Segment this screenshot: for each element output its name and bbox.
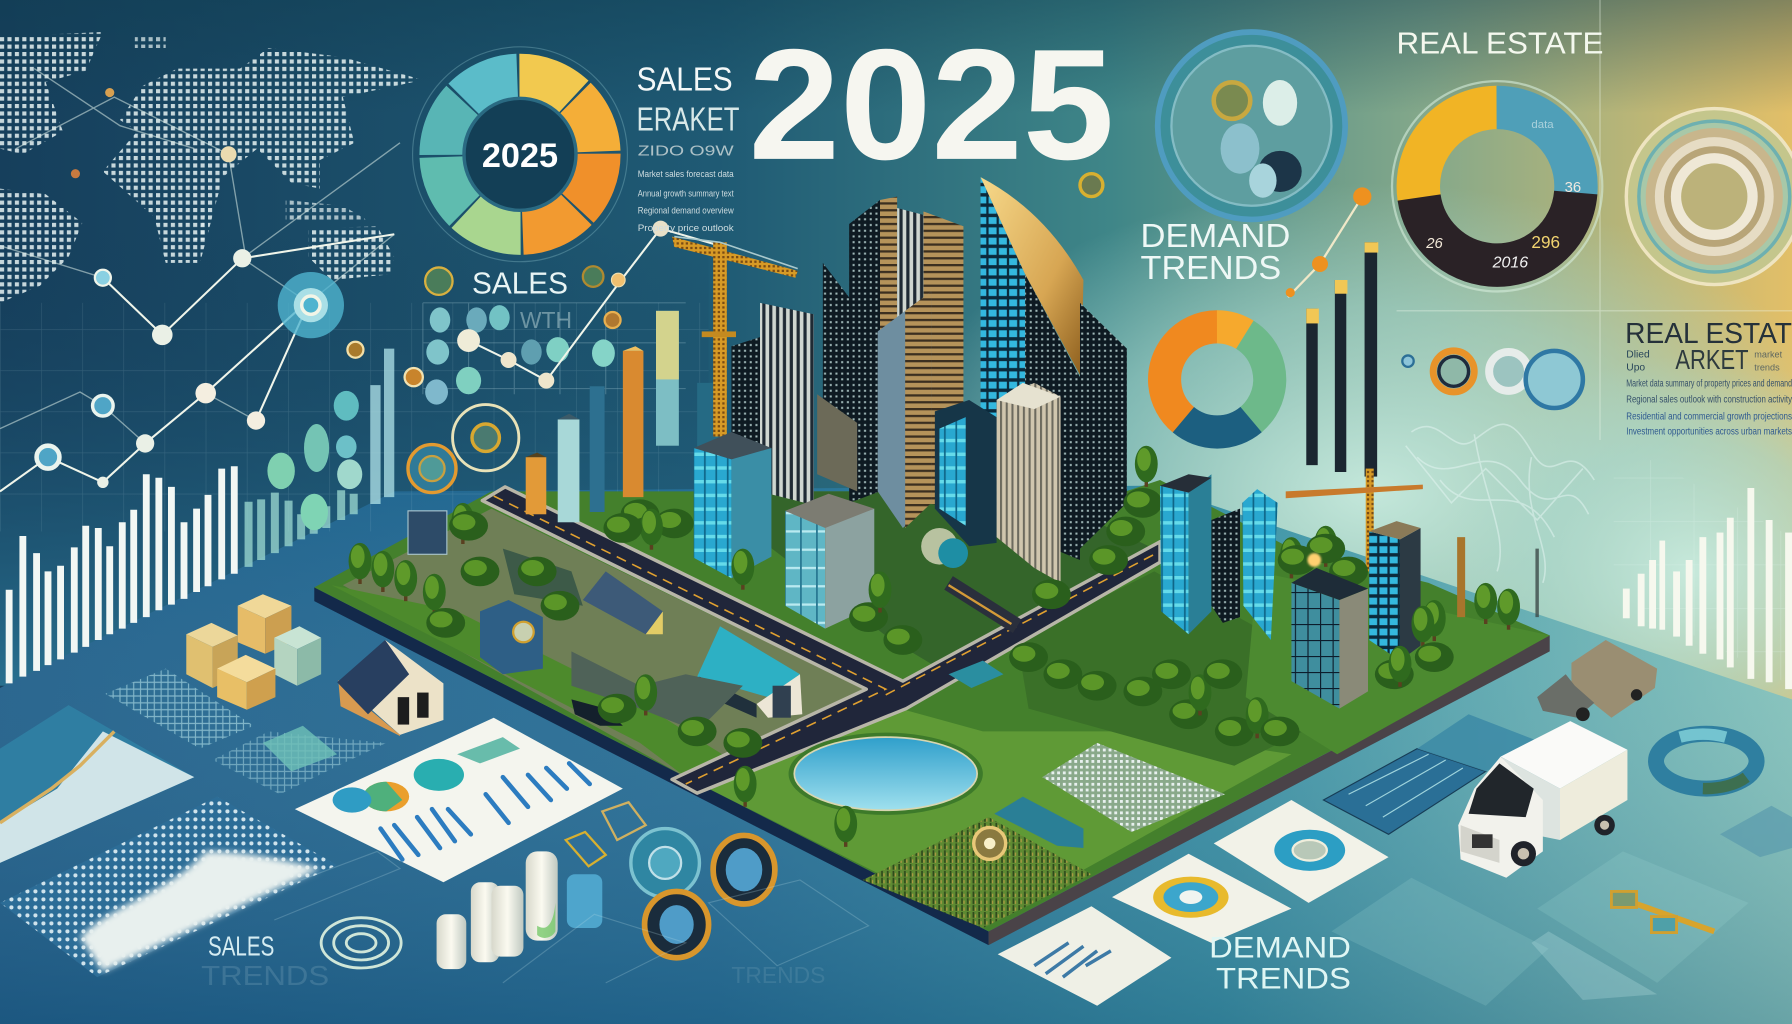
- mountain chart panel: [0, 705, 194, 863]
- faint network sketch: [1406, 424, 1594, 617]
- real estate market text panel: Dlied: [1626, 350, 1650, 361]
- white card: eye ring: [1214, 800, 1389, 903]
- city diorama: [314, 480, 1550, 945]
- tower glass front: [878, 291, 931, 528]
- real estate donut chart: 296: [1531, 232, 1560, 252]
- floor donut ring: [1656, 734, 1757, 789]
- heading: sales trends: TRENDS: [201, 960, 329, 991]
- white card: sketch chart: [998, 906, 1171, 1006]
- map: islands: [135, 37, 366, 240]
- white crop field: [1042, 743, 1225, 832]
- sales label with grid of bubbles: WTH: [520, 307, 572, 333]
- left bar chart: [6, 349, 394, 683]
- glass circle icon: [1080, 32, 1345, 219]
- small blue shops: [480, 600, 543, 674]
- dotted map panel: [0, 797, 337, 977]
- sales label with grid of bubbles: SALES: [472, 266, 568, 301]
- gold lens icons: [631, 829, 775, 958]
- tower stripe back: [731, 337, 760, 478]
- diorama base: [314, 587, 989, 945]
- title: sales market block: Annual growth summary text: [638, 189, 734, 199]
- title: sales market block: [637, 61, 739, 233]
- small grey truck: [1537, 640, 1657, 721]
- tower blue: [1160, 474, 1211, 634]
- top donut chart: [410, 44, 630, 264]
- heading: demand trends: TRENDS: [1141, 250, 1281, 287]
- ring icons: [1402, 351, 1583, 408]
- title: sales market block: ZIDO O9W: [638, 143, 734, 159]
- box green: [274, 626, 321, 686]
- real estate market text panel: REAL ESTAT: [1625, 318, 1792, 350]
- pond: [789, 733, 983, 815]
- title: sales market block: SALES: [637, 61, 733, 98]
- glow light: [1307, 553, 1321, 567]
- faint sketches on floor: TRENDS: [731, 962, 825, 988]
- tower thin crane: [1457, 537, 1465, 617]
- tower white stripes: [760, 303, 814, 505]
- world map: [0, 32, 423, 303]
- trees behind right: [1278, 526, 1368, 586]
- real estate donut chart: [1392, 81, 1602, 291]
- gold target rings: [453, 405, 519, 471]
- heading: demand trends: DEMAND: [1141, 218, 1290, 255]
- cylinder bars: [437, 851, 602, 969]
- tower teal frame: [785, 494, 874, 629]
- glass sphere: [921, 528, 958, 565]
- right bar chart: [1623, 488, 1792, 689]
- title: sales market block: Market sales forecast data: [638, 169, 735, 179]
- boxes: [186, 594, 321, 710]
- right building group: [949, 469, 1520, 746]
- crane left: [672, 237, 798, 437]
- road network: [482, 487, 1160, 793]
- tower slim cyan: [1242, 489, 1278, 640]
- tower teal low: [935, 400, 997, 546]
- tower framed: [1291, 568, 1368, 709]
- tower blue and gold: [849, 197, 897, 503]
- sales label with grid of bubbles: [405, 221, 720, 493]
- donut value labels: 26: [1425, 236, 1444, 252]
- document pie charts: [363, 782, 409, 811]
- small house: [337, 640, 443, 736]
- report document: [295, 718, 623, 882]
- tower dark right: [1080, 303, 1127, 549]
- district ground: [343, 509, 869, 777]
- real estate market text panel: Upo: [1626, 362, 1645, 373]
- tower mid dark: [817, 394, 857, 491]
- crane right: [1286, 469, 1423, 571]
- real estate donut chart: 36: [1565, 180, 1581, 196]
- teal vehicle: [994, 797, 1083, 848]
- real estate donut chart: data: [1531, 119, 1554, 131]
- teal pavilion: [949, 661, 1003, 688]
- transparent data sheets: [1331, 806, 1792, 1006]
- real estate market text panel: trends: [1754, 362, 1780, 372]
- parked van: [571, 699, 623, 726]
- gold clip icon: [1617, 897, 1714, 931]
- tower grey and gold: [897, 208, 963, 509]
- small barn: [583, 571, 663, 634]
- faint sketches on floor: [240, 851, 869, 988]
- map: australia: [309, 226, 394, 280]
- trees right: [1375, 583, 1520, 689]
- orange donut chart: [1143, 305, 1291, 453]
- pie bubbles on wall: [334, 391, 359, 421]
- box front: [217, 655, 275, 710]
- tower cyan glass: [694, 432, 771, 578]
- chart hub glow: [278, 272, 344, 338]
- real estate market text panel: ARKET: [1675, 344, 1749, 375]
- heading: demand trends bottom: TRENDS: [1216, 963, 1351, 996]
- white delivery truck: [1458, 721, 1627, 878]
- map: eurasia and africa: [103, 48, 423, 263]
- network line chart: [0, 69, 400, 491]
- heading: demand trends: [1141, 218, 1290, 287]
- heading: demand trends bottom: DEMAND: [1209, 932, 1351, 965]
- metal tag icons: [566, 802, 646, 866]
- tower dark dots: [823, 263, 859, 469]
- map: americas: [0, 32, 103, 154]
- document blue bars: [381, 763, 590, 859]
- trees left: [349, 503, 857, 847]
- cyan roof house: [697, 626, 800, 697]
- title: sales market block: Regional demand overview: [638, 206, 734, 216]
- tower curved blue gold: [981, 177, 1083, 560]
- black bar chart with trend dots: [1286, 187, 1378, 477]
- title: 2025: 2025: [749, 17, 1114, 193]
- pavement clutter: [571, 651, 743, 731]
- heading: real estate: REAL ESTATE: [1397, 26, 1603, 61]
- mesh paper tiles: [105, 669, 386, 794]
- dark crop field: [863, 817, 1091, 928]
- trees centre meadow: [1009, 642, 1299, 746]
- skyscraper group: [603, 177, 1162, 655]
- box left: [186, 623, 238, 688]
- spiral icon: [321, 918, 401, 968]
- concentric ring icon: [1626, 109, 1792, 285]
- map: south america: [0, 189, 82, 303]
- real estate market text panel: market: [1754, 350, 1783, 360]
- trees mid: [603, 446, 1162, 655]
- box back: [238, 594, 291, 654]
- title: sales market block: ERAKET: [637, 101, 739, 138]
- blue plans on floor: [1323, 714, 1543, 834]
- white card: yellow ring: [1112, 854, 1291, 943]
- real estate donut chart: 2016: [1492, 254, 1528, 271]
- bar columns behind city: [526, 311, 720, 522]
- tower navy: [1369, 521, 1421, 661]
- heading: demand trends bottom: [1209, 932, 1351, 996]
- tower dark back: [1211, 509, 1240, 623]
- real estate market text panel: [1625, 318, 1792, 437]
- donut centre year: 2025: [482, 137, 558, 175]
- tower beige: [997, 383, 1061, 583]
- title: sales market block: Property price outlook: [638, 223, 734, 233]
- heading: sales trends: [201, 918, 401, 991]
- heading: sales trends: SALES: [208, 930, 274, 961]
